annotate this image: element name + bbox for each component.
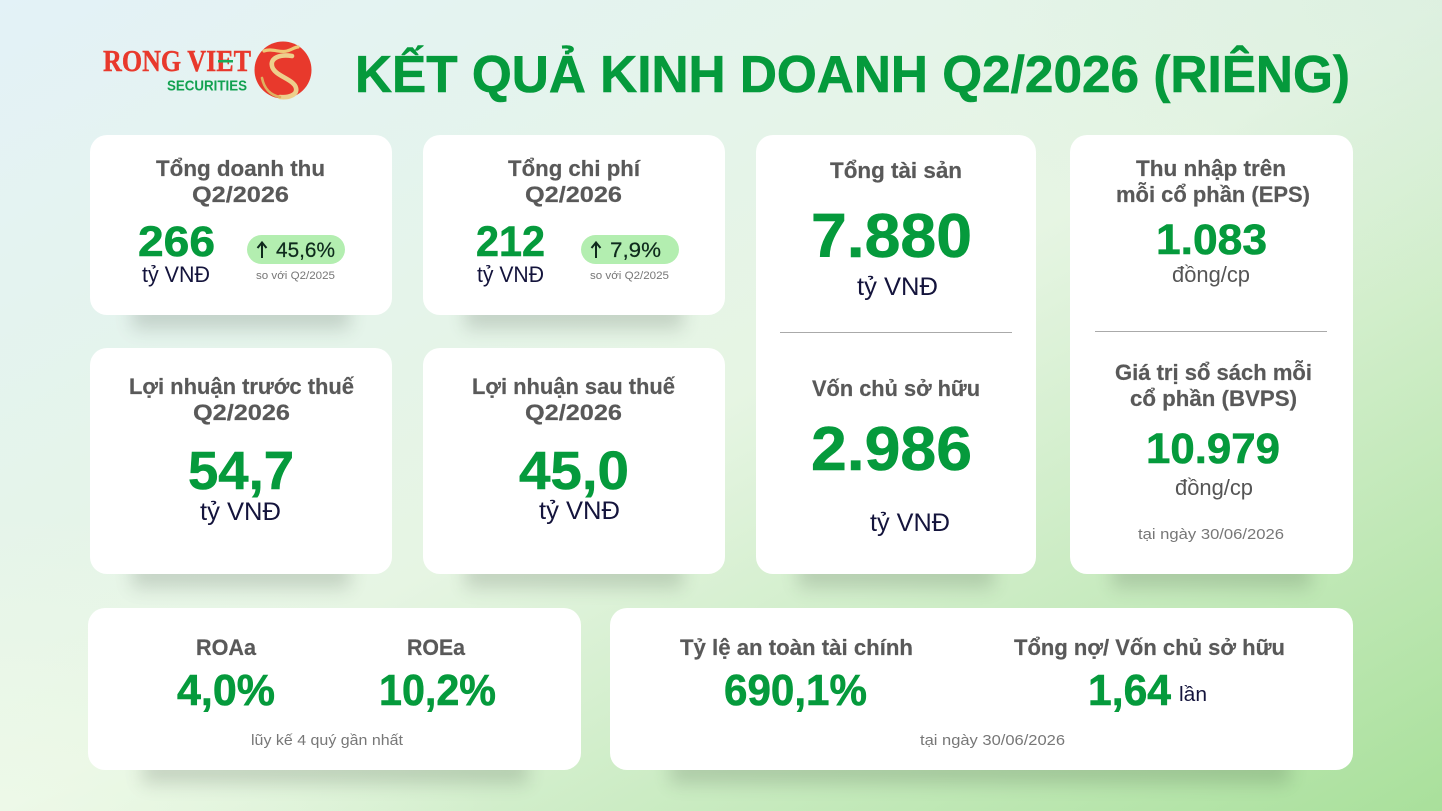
heading: Tổng chi phí: Tổng chi phí bbox=[508, 156, 641, 181]
heading: Tỷ lệ an toàn tài chính: Tỷ lệ an toàn tài chính bbox=[680, 635, 913, 660]
panel: EPS và BVPS bbox=[1070, 135, 1353, 574]
heading: Lợi nhuận sau thuế: Lợi nhuận sau thuế bbox=[472, 374, 676, 399]
badge: +7,9%: 7,9% bbox=[610, 239, 661, 262]
value: 1,64 lần: lần bbox=[1179, 684, 1207, 706]
date note: tại ngày 30/06/2026 bbox=[1138, 526, 1284, 543]
panel: EPS và BVPS: cổ phần (BVPS) bbox=[1130, 386, 1297, 411]
value: 10,2%: 10,2% bbox=[379, 666, 496, 715]
unit: tỷ VNĐ bbox=[477, 262, 544, 287]
value: 1,64 lần: 1,64 bbox=[1088, 666, 1172, 715]
heading: EPS: Thu nhập trên bbox=[1136, 156, 1286, 181]
badge: +45,6% bbox=[247, 235, 345, 264]
panel: Lợi nhuận sau thuế: Q2/2026 bbox=[525, 400, 622, 425]
heading: Lợi nhuận trước thuế: Lợi nhuận trước thuế bbox=[129, 374, 355, 399]
value: 10.979: 10.979 bbox=[1146, 425, 1280, 473]
badge: +7,9% bbox=[581, 235, 679, 264]
unit: đồng/cp bbox=[1175, 475, 1253, 500]
heading: Tổng nợ/ Vốn chủ sở hữu: Tổng nợ/ Vốn chủ sở hữu bbox=[1014, 635, 1285, 660]
value: 266: 266 bbox=[138, 218, 215, 266]
panel: Lợi nhuận trước thuế: Q2/2026 bbox=[193, 400, 290, 425]
value: 2.986: 2.986 bbox=[811, 415, 972, 484]
note: lũy kế 4 quý gần nhất bbox=[251, 732, 404, 749]
title: KẾT QUẢ KINH DOANH Q2/2026 (RIÊNG) bbox=[355, 45, 1350, 104]
logo: Rong Viet Securities: RONG VIET bbox=[103, 43, 251, 78]
value: 690,1%: 690,1% bbox=[724, 666, 867, 715]
value: 7.880: 7.880 bbox=[811, 202, 972, 271]
logo: Rong Viet Securities bbox=[103, 42, 312, 98]
unit: tỷ VNĐ bbox=[142, 262, 210, 287]
panel: Tổng chi phí: Q2/2026 bbox=[525, 182, 622, 207]
value: 212: 212 bbox=[476, 218, 545, 266]
comparison note: so với Q2/2025 bbox=[590, 270, 669, 282]
comparison note: so với Q2/2025 bbox=[256, 270, 335, 282]
logo: Rong Viet Securities: SECURITIES bbox=[167, 78, 247, 94]
value: 1.083: 1.083 bbox=[1156, 216, 1267, 264]
heading: BVPS: Giá trị sổ sách mỗi bbox=[1115, 360, 1312, 385]
panel: Tổng tài sản và Vốn chủ sở hữu bbox=[756, 135, 1036, 574]
unit: tỷ VNĐ bbox=[200, 498, 281, 526]
unit: tỷ VNĐ bbox=[539, 497, 620, 525]
value: 54,7: 54,7 bbox=[188, 441, 294, 501]
heading: Tổng tài sản: Tổng tài sản bbox=[830, 158, 962, 183]
badge: +45,6%: 45,6% bbox=[276, 239, 335, 262]
panel: Lợi nhuận sau thuế bbox=[423, 348, 725, 574]
panel: Lợi nhuận trước thuế bbox=[90, 348, 392, 574]
panel: Tổng doanh thu: Q2/2026 bbox=[192, 182, 289, 207]
panel: ROAa và ROEa bbox=[88, 608, 581, 770]
panel: Tổng doanh thu bbox=[90, 135, 392, 315]
value: 4,0%: 4,0% bbox=[177, 666, 275, 715]
heading: Vốn chủ sở hữu: Vốn chủ sở hữu bbox=[812, 376, 980, 401]
panel: Tổng chi phí bbox=[423, 135, 725, 315]
panel: EPS và BVPS: mỗi cổ phần (EPS) bbox=[1116, 182, 1310, 207]
heading: Tổng doanh thu: Tổng doanh thu bbox=[156, 156, 325, 181]
value: 45,0: 45,0 bbox=[519, 441, 629, 501]
heading: ROEa: ROEa bbox=[407, 635, 466, 660]
heading: ROAa: ROAa bbox=[196, 635, 257, 660]
unit: tỷ VNĐ bbox=[870, 509, 950, 537]
date note: tại ngày 30/06/2026 bbox=[920, 732, 1065, 749]
unit: tỷ VNĐ bbox=[857, 273, 938, 301]
unit: đồng/cp bbox=[1172, 262, 1250, 287]
panel: Tỷ lệ an toàn tài chính và Tổng nợ/Vốn chủ sở hữu bbox=[610, 608, 1353, 770]
